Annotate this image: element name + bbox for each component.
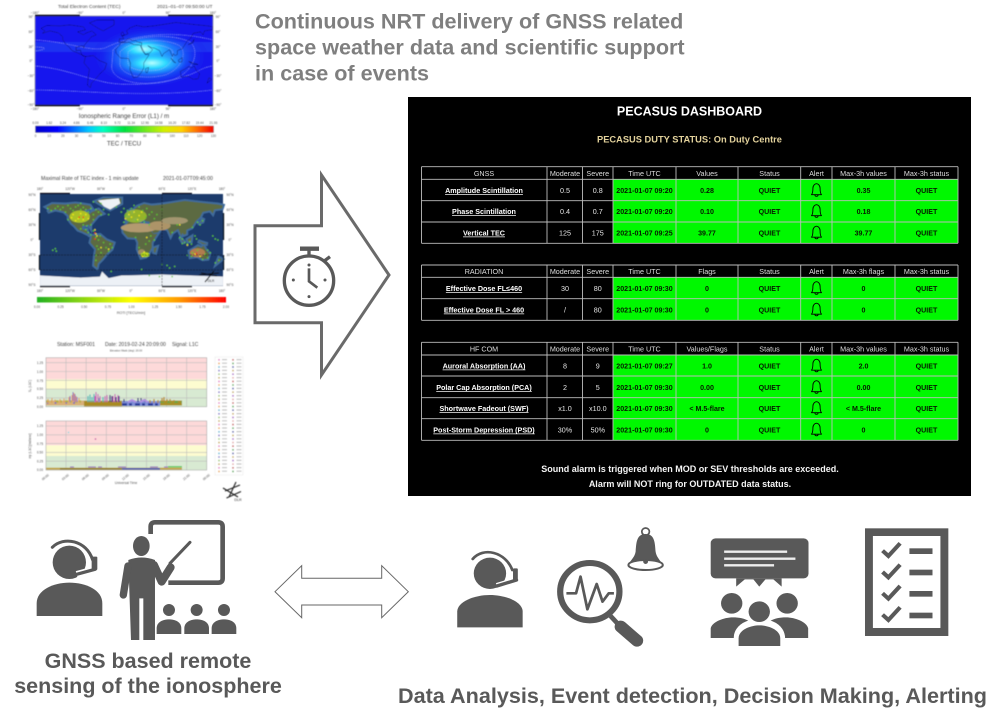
table: GNSS: Values [696, 169, 718, 178]
table: radiation: 0 [862, 306, 866, 314]
chart: total electron content map: 30° [29, 45, 34, 49]
chart: scintillation station plots: Date: 2019-02-24 20:09:00 [105, 342, 166, 348]
chart: scintillation station plots: 0.50 [37, 387, 43, 391]
chart: total electron content map: 0° [122, 11, 126, 15]
table: HF COM: QUIET [759, 362, 781, 370]
chart: total electron content map: 6.48 [87, 121, 94, 125]
table: GNSS: 0.8 [593, 186, 603, 195]
table: GNSS: QUIET [916, 187, 938, 195]
table: radiation: 30 [561, 284, 569, 293]
chart: rate of TEC index world map: 0° [129, 187, 133, 191]
chart: rate of TEC index world map: 90°S [227, 283, 233, 287]
title: in case of events [255, 60, 429, 86]
chart: total electron content map: 60 [116, 134, 120, 138]
table: GNSS: 39.77 [698, 230, 716, 238]
table: HF COM: 0 [705, 426, 709, 434]
chart: total electron content map: Total Electron Content (TEC) [58, 4, 121, 10]
table: GNSS: Time UTC [628, 169, 661, 178]
chart: rate of TEC index world map: 90°N [28, 193, 36, 197]
chart: rate of TEC index world map: 0.75 [105, 305, 111, 309]
chart: total electron content map: 60° [29, 30, 34, 34]
chart: rate of TEC index world map: 180° [219, 289, 226, 293]
table: HF COM: x10.0 [589, 404, 607, 413]
chart: scintillation station plots: 21:00 [182, 473, 191, 481]
chart: rate of TEC index world map: ROTI [TECU/min] [117, 311, 145, 315]
chart: rate of TEC index world map: 0° [228, 238, 232, 242]
chart: rate of TEC index world map: 180° [37, 289, 44, 293]
chart: scintillation station plots: 0.75 [37, 379, 43, 383]
table: radiation: / [564, 306, 566, 314]
chart: scintillation station plots: 0.25 [37, 460, 43, 464]
table: radiation: QUIET [916, 306, 938, 314]
table: radiation: Moderate [550, 267, 580, 276]
table: HF COM: 9 [596, 362, 600, 370]
chart: scintillation station plots: 15:00 [142, 473, 151, 481]
table: GNSS: 0.35 [857, 187, 870, 195]
table: HF COM: Alert [809, 344, 824, 354]
chart: scintillation station plots: 0.00 [37, 468, 43, 472]
chart: total electron content map: −90° [77, 107, 84, 111]
chart: scintillation station plots: 00:00 [41, 473, 50, 481]
table: GNSS: Max-3h status [904, 169, 949, 178]
chart: total electron content map: 90° [166, 107, 171, 111]
table: HF COM: QUIET [759, 426, 781, 434]
panel: PECASUS dashboard [408, 97, 971, 496]
table: radiation: 0 [705, 285, 709, 293]
chart: total electron content map: 120 [197, 134, 203, 138]
chart: total electron content map: 180° [210, 11, 217, 15]
alarm note: Sound alarm is triggered when MOD or SEV thresholds are exceeded. [541, 464, 839, 474]
chart: rate of TEC index world map: 30°N [28, 223, 36, 227]
title: space weather data and scientific support [255, 34, 685, 60]
chart: total electron content map: 80 [143, 134, 147, 138]
chart: rate of TEC index world map: 2021-01-07T09:45:00 [163, 176, 213, 182]
table: radiation: QUIET [759, 306, 781, 314]
chart: scintillation station plots: 1.00 [37, 370, 43, 374]
chart: rate of TEC index world map: 90°N [226, 193, 234, 197]
chart: scintillation station plots: 0.50 [37, 450, 43, 454]
table: HF COM: 2021-01-07 09:30 [616, 426, 673, 434]
chart: total electron content map: 9.72 [114, 121, 121, 125]
table: HF COM: 2.0 [859, 362, 868, 370]
table: HF COM: Status [759, 344, 780, 354]
table: HF COM: 0.00 [857, 384, 870, 392]
chart: rate of TEC index world map: 0.25 [57, 305, 64, 309]
chart: rate of TEC index world map: 120°E [188, 289, 196, 293]
table: HF COM: QUIET [916, 362, 938, 370]
chart: scintillation station plots: 1.00 [37, 433, 43, 437]
chart: total electron content map: Ionospheric Range Error (L1) / m [79, 113, 169, 120]
chart: total electron content map: −60° [215, 89, 222, 93]
table: GNSS: Vertical TEC [463, 228, 505, 238]
double arrow [275, 566, 408, 618]
chart: rate of TEC index world map: 0.50 [81, 305, 88, 309]
table: GNSS: QUIET [759, 230, 781, 238]
chart: total electron content map: 0.00 [32, 121, 39, 125]
chart: scintillation station plots: 06:00 [81, 473, 90, 481]
table: HF COM: Max-3h values [840, 344, 887, 354]
icon: bell [628, 528, 663, 570]
chart: rate of TEC index world map: 0° [30, 238, 34, 242]
chart: total electron content map: 90° [29, 15, 34, 19]
label: GNSS remote sensing [14, 649, 282, 698]
table: GNSS: 2021-01-07 09:25 [616, 230, 673, 238]
plot: S4 panel [46, 358, 207, 407]
icon: group discussion [711, 538, 809, 646]
table: HF COM: QUIET [759, 384, 781, 392]
table: HF COM: QUIET [916, 405, 938, 413]
chart: rate of TEC index world map: 30°S [227, 253, 233, 257]
table: radiation: Effective Dose FL≤460 [446, 284, 522, 293]
alarm note: Alarm will NOT ring for OUTDATED data status. [589, 479, 791, 489]
table: GNSS: 0.5 [560, 186, 570, 195]
table: GNSS: QUIET [759, 208, 781, 216]
chart: total electron content map: 1.62 [46, 121, 53, 125]
chart: rate of TEC index world map: 60°S [29, 268, 35, 272]
chart: rate of TEC index world map: Maximal Rate of TEC index - 1 min update [41, 176, 139, 182]
chart: total electron content map: 30 [75, 134, 78, 138]
chart: total electron content map: −60° [28, 89, 35, 93]
chart: scintillation station plots: 1.25 [37, 361, 43, 365]
chart: total electron content map: −180° [31, 11, 40, 15]
table: radiation: Max-3h flags [843, 267, 884, 276]
chart: scintillation station plots: 12:00 [121, 473, 130, 481]
icon: checklist [865, 528, 948, 636]
chart: total electron content map: −180° [31, 107, 40, 111]
legend [215, 357, 243, 475]
chart: total electron content map: 12.96 [141, 121, 149, 125]
chart: rate of TEC index world map: 180° [219, 187, 226, 191]
chart: rate of TEC index world map: 1.25 [152, 305, 158, 309]
chart: scintillation station plots: 0.25 [37, 396, 43, 400]
title [255, 8, 685, 86]
table: HF COM: 2021-01-07 09:27 [616, 362, 673, 370]
chart: rate of TEC index world map: 2.00 [223, 305, 229, 309]
table: radiation: 2021-01-07 09:30 [616, 285, 673, 293]
icon: DLR logo: DLR [234, 498, 242, 502]
table: GNSS: Status [759, 169, 780, 178]
chart: scintillation station plots: 18:00 [162, 473, 171, 481]
table: GNSS [422, 167, 958, 243]
chart: rate of TEC index world map: 1.75 [199, 305, 206, 309]
chart: total electron content map: 180° [210, 107, 217, 111]
chart: total electron content map: 0 [35, 134, 37, 138]
chart: scintillation station plots: Signal: L1C [172, 342, 199, 348]
table: GNSS: QUIET [916, 208, 938, 216]
table: GNSS: 0.18 [857, 208, 870, 216]
table: HF COM: < M.5-flare [846, 405, 881, 413]
table: radiation: 0 [705, 306, 709, 314]
table: HF COM: 5 [596, 383, 600, 392]
table: GNSS: GNSS [474, 169, 494, 178]
table: radiation: QUIET [759, 285, 781, 293]
chart: rate of TEC index world map [28, 176, 234, 315]
chart: total electron content map: 0° [216, 59, 220, 63]
table: GNSS: Severe [586, 169, 609, 178]
table: HF COM: Polar Cap Absorption (PCA) [436, 383, 532, 392]
chart: total electron content map: 50 [102, 134, 106, 138]
chart: rate of TEC index world map: 60°W [97, 289, 105, 293]
chart: rate of TEC index world map: 120°W [65, 187, 75, 191]
table: radiation: Severe [586, 267, 609, 276]
chart: total electron content map: 90° [166, 11, 171, 15]
chart: total electron content map: 20 [61, 134, 65, 138]
chart: total electron content map: 2021–01–07 09:50:00 UT [157, 4, 212, 10]
table: HF COM: QUIET [759, 405, 781, 413]
chart: scintillation station plots: 09:00 [101, 473, 110, 481]
table: radiation: 80 [594, 284, 602, 293]
chart: rate of TEC index world map: 60°S [227, 268, 233, 272]
plot: sigma phi panel [46, 421, 207, 470]
table: GNSS: Max-3h values [840, 169, 887, 178]
chart: total electron content map: 3.24 [60, 121, 66, 125]
table: HF COM: Shortwave Fadeout (SWF) [439, 404, 529, 413]
table: HF COM: < M.5-flare [689, 405, 725, 413]
arrow with stopwatch [255, 175, 389, 375]
chart: rate of TEC index world map: 60°E [159, 289, 165, 293]
chart: scintillation station plots: 0.00 [37, 405, 43, 409]
chart: scintillation station plots: 03:00 [61, 473, 70, 481]
chart: total electron content map: 0° [29, 59, 33, 63]
chart: total electron content map: −30° [215, 74, 222, 78]
chart: total electron content map: 10 [47, 134, 51, 138]
table: radiation: Flags [698, 267, 716, 276]
table: GNSS: Amplitude Scintillation [445, 186, 523, 195]
icon: DLR logo [223, 482, 242, 502]
chart: rate of TEC index world map: DLR [208, 279, 215, 283]
table: HF COM: Max-3h status [904, 344, 949, 354]
label: GNSS remote sensing: GNSS based remote [45, 649, 251, 673]
table: radiation: RADIATION [465, 267, 503, 276]
table: HF COM: Moderate [550, 344, 580, 354]
chart: rate of TEC index world map: 60°W [97, 187, 105, 191]
table: HF COM: Values/Flags [686, 344, 728, 354]
chart: total electron content map: 19.44 [196, 121, 204, 125]
icon: operator with headset (left) [37, 541, 102, 616]
table: HF COM: Post-Storm Depression (PSD) [433, 426, 535, 434]
chart: rate of TEC index world map: 0° [129, 289, 133, 293]
chart: scintillation station plots: σφ (L1C)[radians] [28, 433, 32, 459]
table: HF COM: 8 [563, 362, 567, 370]
table: GNSS: 0.10 [700, 208, 714, 216]
chart: total electron content map: 90° [216, 15, 221, 19]
chart: rate of TEC index world map: 1.00 [128, 305, 135, 309]
chart: scintillation station plots: 00:00 [202, 473, 211, 481]
chart: rate of TEC index world map: 30°N [226, 223, 234, 227]
table: HF COM: HF COM [470, 344, 498, 354]
table: HF COM: Severe [586, 344, 609, 354]
table: GNSS: 125 [559, 228, 571, 238]
chart: total electron content map: 130 [211, 134, 216, 138]
chart: rate of TEC index world map: 180° [37, 187, 44, 191]
table: HF COM: 0.00 [700, 384, 714, 392]
table: HF COM: Auroral Absorption (AA) [443, 362, 526, 370]
table: GNSS: Phase Scintillation [452, 207, 516, 216]
chart: total electron content map: 60° [216, 30, 221, 34]
table: HF COM: 2 [563, 383, 567, 392]
chart: rate of TEC index world map: 60°N [28, 208, 36, 212]
table: HF COM: QUIET [916, 384, 938, 392]
table: radiation: Alert [809, 267, 824, 276]
chart: scintillation station plots: Station: MSF001 [57, 342, 95, 348]
table: radiation: Max-3h status [904, 267, 949, 276]
chart: scintillation station plots: S₄ (L1C) [28, 380, 32, 392]
chart: scintillation station plots [28, 342, 243, 502]
table: GNSS: 0.28 [700, 187, 714, 195]
table: radiation: Time UTC [628, 267, 661, 276]
chart: total electron content map: 14.58 [155, 121, 163, 125]
icon: teacher at board with audience [123, 522, 236, 640]
chart: total electron content map: 100 [170, 134, 175, 138]
chart: rate of TEC index world map: 30°S [29, 253, 35, 257]
chart: rate of TEC index world map: 1.50 [176, 305, 182, 309]
label: data analysis: Data Analysis, Event detection, Decision Making, Alerting [398, 684, 987, 708]
table: GNSS: 2021-01-07 09:20 [616, 187, 673, 195]
chart: total electron content map: 4.86 [73, 121, 80, 125]
chart: total electron content map: 17.82 [182, 121, 190, 125]
table: HF COM: 30% [558, 426, 573, 434]
table: GNSS: Alert [809, 169, 824, 178]
table: HF COM: x1.0 [558, 404, 572, 413]
chart: total electron content map: 70 [129, 134, 133, 138]
chart: total electron content map: −90° [215, 103, 222, 107]
table: HF COM: 1.0 [702, 362, 712, 370]
chart: scintillation station plots: Universal Time [115, 481, 137, 485]
chart: rate of TEC index world map: 120°E [188, 187, 196, 191]
chart: scintillation station plots: Elevation Mask (deg): 20.00 [110, 348, 143, 352]
chart: rate of TEC index world map: 0.00 [34, 305, 40, 309]
table: GNSS: 0.7 [593, 207, 603, 216]
chart: total electron content map: 21.06 [209, 121, 218, 125]
chart: total electron content map: 90 [157, 134, 161, 138]
table: GNSS: Moderate [550, 169, 580, 178]
chart: total electron content map: 8.10 [101, 121, 107, 125]
dashboard title: PECASUS DASHBOARD [617, 104, 762, 118]
table: HF COM: 2021-01-07 09:30 [616, 384, 673, 392]
chart: rate of TEC index world map: 60°E [159, 187, 165, 191]
chart: rate of TEC index world map: 60°N [226, 208, 234, 212]
table: radiation [422, 265, 958, 320]
icon: operator with headset (right) [457, 552, 523, 627]
table: radiation: 0 [862, 285, 866, 293]
table: radiation: QUIET [916, 285, 938, 293]
table: HF COM: Time UTC [628, 344, 661, 354]
label: GNSS remote sensing: sensing of the ionosphere [14, 674, 282, 698]
duty status: PECASUS DUTY STATUS: On Duty Centre [597, 134, 782, 144]
title: Continuous NRT delivery of GNSS related [255, 8, 683, 34]
chart: total electron content map [28, 4, 222, 148]
icon: magnifier with signal and bell [560, 528, 663, 641]
table: GNSS: 0.4 [560, 207, 570, 216]
table: GNSS: QUIET [916, 230, 938, 238]
table: radiation: 80 [594, 306, 602, 314]
chart: rate of TEC index world map: 90°S [29, 283, 35, 287]
table: GNSS: 39.77 [855, 230, 872, 238]
table: HF COM: QUIET [916, 426, 938, 434]
chart: total electron content map: −90° [77, 11, 84, 15]
table: GNSS: 175 [592, 228, 604, 238]
chart: scintillation station plots: 0.75 [37, 442, 43, 446]
chart: total electron content map: −90° [28, 103, 35, 107]
table: HF COM: 2021-01-07 09:30 [616, 405, 673, 413]
table: HF COM [422, 342, 958, 440]
chart: total electron content map: 0° [122, 107, 126, 111]
chart: total electron content map: TEC / TECU [107, 140, 141, 148]
table: radiation: 2021-01-07 09:30 [616, 306, 673, 314]
table: GNSS: QUIET [759, 187, 781, 195]
table: HF COM: 0 [862, 426, 866, 434]
chart: total electron content map: 11.34 [127, 121, 135, 125]
alarm note [541, 464, 839, 489]
chart: total electron content map: 40 [88, 134, 92, 138]
chart: scintillation station plots: 1.25 [37, 424, 43, 428]
chart: total electron content map: 30° [216, 45, 221, 49]
table: HF COM: 50% [591, 426, 606, 434]
chart: total electron content map: 110 [183, 134, 189, 138]
chart: rate of TEC index world map: 120°W [65, 289, 75, 293]
table: radiation: Effective Dose FL > 460 [444, 306, 524, 314]
table: radiation: Status [759, 267, 780, 276]
chart: total electron content map: −30° [28, 74, 35, 78]
icon: stopwatch [284, 249, 334, 305]
table: GNSS: 2021-01-07 09:20 [616, 208, 673, 216]
chart: total electron content map: 16.20 [168, 121, 177, 125]
